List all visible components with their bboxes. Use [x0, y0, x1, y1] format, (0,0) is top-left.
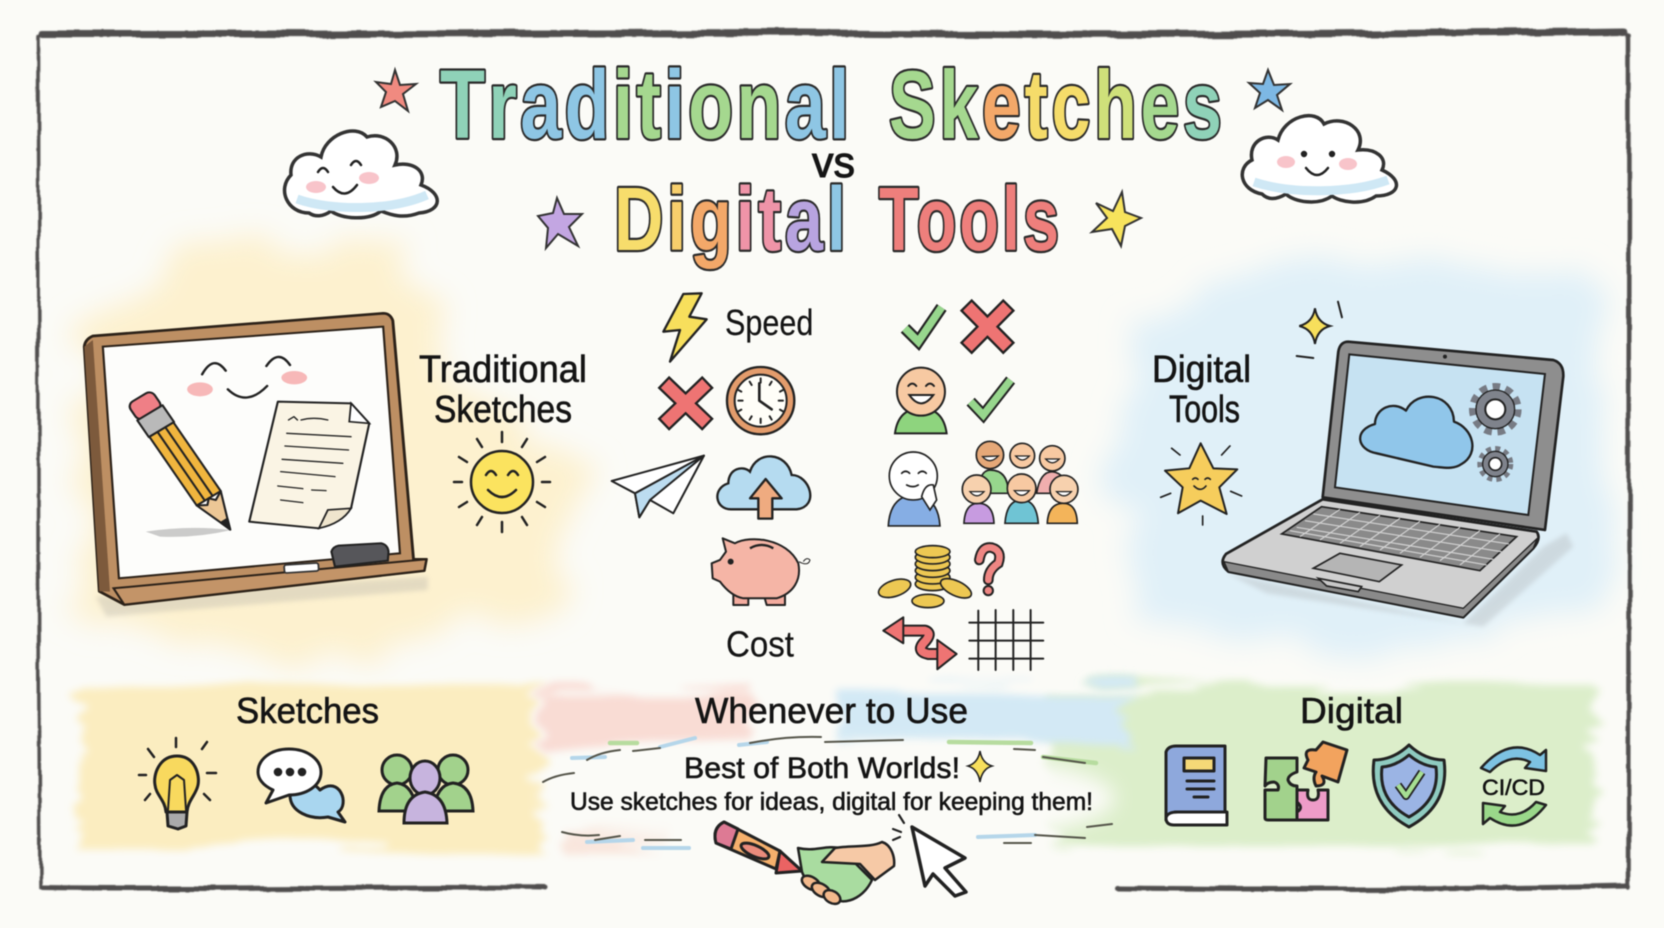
star: purple — [538, 198, 582, 248]
callout edge marks — [543, 737, 1112, 848]
icon: cloud upload — [717, 456, 810, 519]
label: Digital Tools: Tools — [1169, 389, 1240, 431]
laptop base — [1223, 499, 1538, 617]
illustration: laptop with cloud and gears — [1161, 302, 1573, 627]
icon: question mark — [979, 547, 1000, 595]
panel: Whenever to Use — [543, 690, 1112, 907]
icon: crayon — [715, 822, 802, 873]
cloud: right smiling — [1242, 116, 1396, 202]
icon: happy person — [895, 368, 947, 433]
title: Traditional: Traditional — [440, 51, 853, 159]
icon: thoughtful person — [888, 452, 940, 526]
board frame — [84, 313, 426, 605]
trackpad — [1313, 553, 1402, 582]
screen cloud — [1360, 397, 1472, 468]
title: Tools: Tools — [879, 169, 1062, 270]
icon: lightning — [663, 293, 707, 362]
paper note — [249, 402, 369, 528]
background colour washes — [78, 245, 1620, 851]
icon: book — [1166, 746, 1227, 825]
band: Digital — [1166, 690, 1546, 827]
label: Cost: Cost — [726, 624, 794, 665]
keyboard — [1282, 507, 1517, 571]
board smile — [202, 357, 290, 398]
heading: Digital: Digital — [1300, 690, 1403, 731]
icon: squiggle arrow — [883, 617, 957, 669]
icon: shield with check — [1373, 745, 1445, 827]
cloud: left smiling — [285, 131, 437, 218]
label: Traditional Sketches: Sketches — [434, 389, 572, 431]
label: Digital Tools: Digital — [1152, 349, 1251, 391]
label: Digital Tools — [1152, 349, 1251, 431]
title: Sketches: Sketches — [889, 50, 1226, 159]
icon: light bulb — [139, 738, 216, 829]
callout: advice: Use sketches for ideas, digital for keeping them! — [570, 788, 1093, 816]
icon: CI/CD arrows: CI/CD — [1482, 775, 1545, 800]
icon: paper plane — [612, 456, 704, 517]
star: yellow — [1092, 192, 1141, 246]
icon: red cross — [972, 311, 1003, 343]
title: Digital: Digital — [614, 169, 850, 269]
icon: smiling sun — [454, 432, 550, 532]
star: red — [376, 70, 416, 111]
large gear — [1473, 387, 1518, 432]
icon: grid — [969, 610, 1043, 670]
illustration: chalkboard with pencil and paper — [84, 313, 428, 617]
comparison column icons — [612, 293, 1078, 670]
heading: Sketches: Sketches — [236, 690, 379, 731]
label: Traditional Sketches — [419, 349, 587, 431]
icon: chat bubbles — [258, 749, 345, 822]
star: blue — [1249, 70, 1290, 110]
icon: people group — [379, 755, 473, 823]
icon: piggy bank — [712, 538, 810, 605]
label: Speed: Speed — [725, 302, 813, 343]
icon: sparkle — [968, 751, 992, 782]
icon: green tick — [905, 307, 942, 342]
laptop screen — [1335, 354, 1545, 515]
heading: Whenever to Use: Whenever to Use — [695, 690, 968, 731]
pencil — [127, 390, 243, 537]
callout: Best of Both Worlds: Best of Both Worlds! — [684, 752, 960, 785]
icon: coins — [876, 546, 974, 608]
sparkle — [1297, 302, 1342, 358]
chalk — [284, 563, 319, 573]
board surface — [103, 327, 400, 578]
ledge — [114, 559, 426, 605]
icon: clock — [727, 367, 794, 434]
icon: puzzle pieces — [1265, 742, 1347, 820]
icon: mouse cursor — [893, 815, 966, 896]
vs: vs — [812, 138, 855, 187]
icon: handshake — [798, 842, 894, 907]
title — [440, 50, 1226, 270]
icon: group of happy people — [962, 441, 1078, 523]
eraser — [331, 543, 389, 567]
label: Traditional Sketches: Traditional — [419, 349, 587, 391]
small gear — [1480, 449, 1511, 479]
icon: green tick — [971, 380, 1011, 415]
icon: smiling star — [1161, 443, 1242, 525]
laptop lid — [1323, 342, 1563, 530]
icon: red cross — [669, 388, 702, 419]
icon: CI/CD arrows — [1481, 747, 1546, 826]
band: Sketches — [139, 690, 473, 829]
